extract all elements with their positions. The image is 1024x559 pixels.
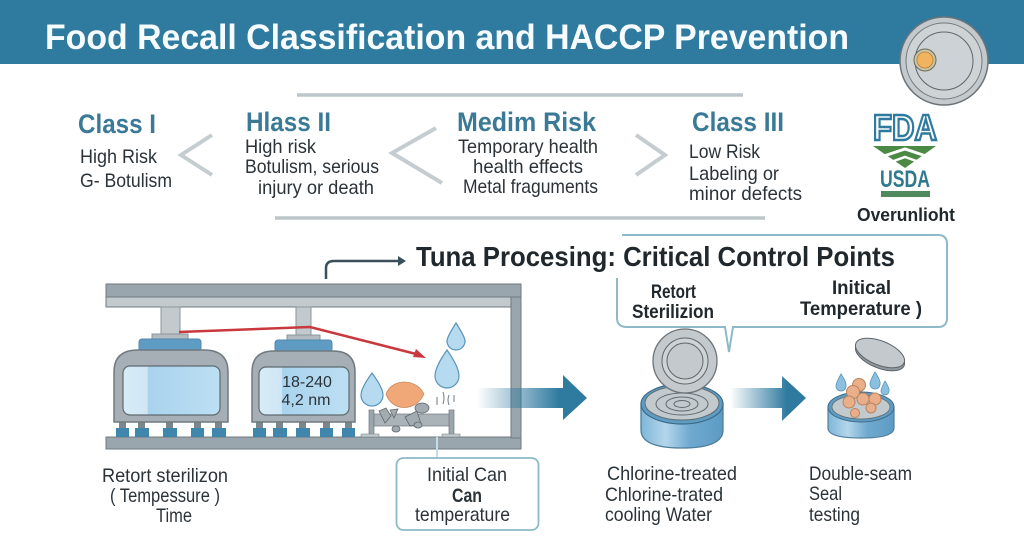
callout: critical control points: Retort <box>651 282 697 303</box>
title: Food Recall Classification and HACCP Prevention <box>45 18 849 57</box>
panel: Class I: High Risk <box>80 146 157 168</box>
panel: Class I: G- Botulism <box>80 170 172 192</box>
icon: retort vessel 2: 18-240 <box>282 374 332 391</box>
callout: initial can temperature: Initial Can <box>427 464 507 486</box>
icon: sample table with fish and debris <box>361 382 460 437</box>
arrow: red flow line <box>179 327 426 358</box>
panel: Class II: Botulism, serious <box>245 156 379 178</box>
panel: Class II: injury or death <box>258 177 374 199</box>
callout: initial can temperature: Can <box>452 485 482 507</box>
arrow: chevron left 2 <box>392 128 442 183</box>
panel: Class I <box>78 109 172 192</box>
arrow: chevron left 1 <box>181 135 212 175</box>
text: retort sterilization label: ( Tempessure ) <box>110 485 220 507</box>
icon: retort vessel 2: 4,2 nm <box>282 392 330 409</box>
icon: open can with lid <box>641 329 723 448</box>
panel: Medium Risk: health effects <box>473 156 583 178</box>
arrow: flow to seal test <box>730 376 806 421</box>
text: double-seam label: Seal <box>809 483 842 505</box>
arrow: chevron right <box>636 135 665 175</box>
text: double-seam label: testing <box>809 504 860 526</box>
panel: Class III: Labeling or <box>689 163 779 185</box>
panel: Class II: High risk <box>245 136 316 158</box>
text: double-seam label: Double-seam <box>809 463 912 485</box>
icon: FDA and USDA logos <box>857 107 955 225</box>
icon: can lid seal <box>900 17 988 105</box>
icon: water drops <box>361 323 465 406</box>
callout: critical control points <box>617 235 947 352</box>
icon: small can with tuna pieces <box>828 332 909 438</box>
icon: retort vessel 2 <box>252 307 355 437</box>
callout: critical control points: Sterilizion <box>632 302 714 323</box>
heading: Tuna processing: Tuna Procesing: Critical Control Points <box>416 241 895 272</box>
text: chlorine-treated water label: Chlorine-treated <box>607 463 737 485</box>
text: retort sterilization label <box>102 465 228 527</box>
icon: retort vessel 1 <box>114 307 228 437</box>
panel: Class II: Hlass II <box>246 107 331 137</box>
retort machine frame <box>106 284 521 449</box>
header banner <box>0 0 1024 64</box>
callout: initial can temperature <box>396 458 538 530</box>
text: retort sterilization label: Retort sterilizon <box>102 465 228 487</box>
callout: critical control points: Initical <box>832 278 891 299</box>
panel: Class II <box>245 107 379 199</box>
panel: Class III: minor defects <box>689 183 802 205</box>
panel: Class III <box>689 107 802 205</box>
arrow: to section heading <box>326 256 406 279</box>
icon: FDA and USDA logos: Overunlioht <box>857 205 955 225</box>
text: double-seam label <box>809 463 912 526</box>
callout: critical control points: Temperature ) <box>800 299 922 320</box>
panel: Class III: Class III <box>692 107 784 137</box>
text: chlorine-treated water label: cooling Water <box>605 504 712 526</box>
icon: FDA and USDA logos: FDA <box>873 107 937 148</box>
arrow: flow to can <box>477 375 587 420</box>
panel: Class I: Class I <box>78 109 156 139</box>
panel: Medium Risk: Medim Risk <box>457 107 597 137</box>
text: chlorine-treated water label <box>605 463 737 526</box>
panel: Medium Risk: Metal fraguments <box>463 176 598 198</box>
panel: Class III: Low Risk <box>689 141 760 163</box>
text: chlorine-treated water label: Chlorine-trated <box>605 484 723 506</box>
text: retort sterilization label: Time <box>156 505 192 527</box>
icon: FDA and USDA logos: USDA <box>880 166 930 193</box>
panel: Medium Risk <box>457 107 598 198</box>
panel: Medium Risk: Temporary health <box>458 136 598 158</box>
callout: initial can temperature: temperature <box>415 504 510 526</box>
